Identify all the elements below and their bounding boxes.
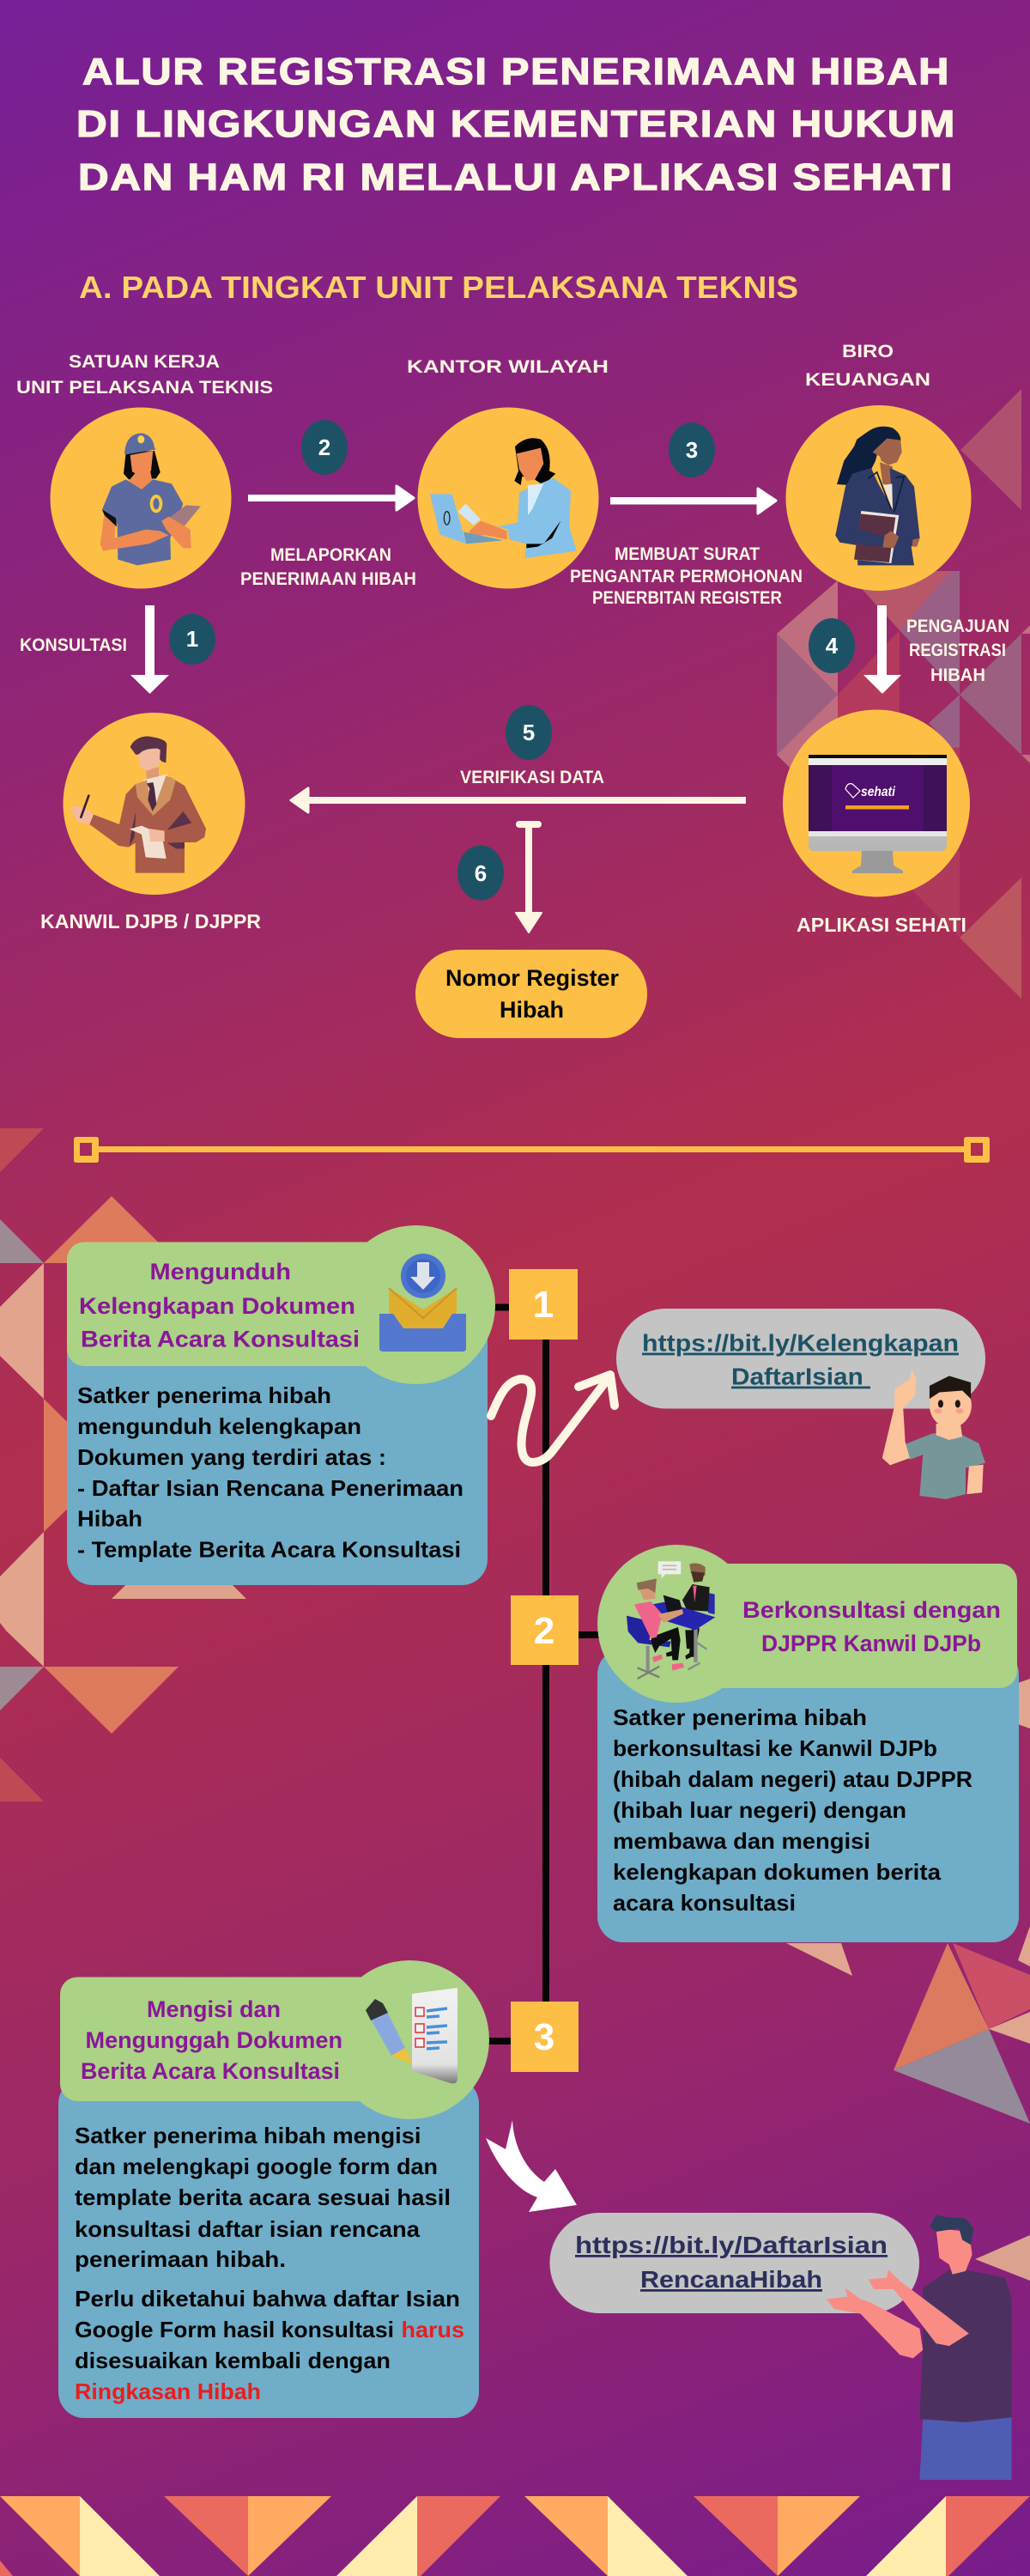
panel: step 1: Hibah [77, 1506, 142, 1532]
panel: step 1: Dokumen yang terdiri atas : [77, 1444, 386, 1470]
panel: step 1: Berita Acara Konsultasi [81, 1326, 360, 1352]
badge 3 [669, 422, 715, 477]
label: biro keuangan [805, 342, 930, 390]
badge 5 [506, 705, 552, 760]
step number 1: 1 [533, 1284, 554, 1326]
panel: step 2: DJPPR Kanwil DJPb [761, 1631, 981, 1656]
icon: sehati monitor in circle [783, 709, 970, 896]
badge 4: 4 [826, 633, 839, 659]
icon: pencil and checklist [366, 1988, 457, 2083]
panel: step 3: Google Form hasil konsultasi [75, 2317, 394, 2342]
panel: step 2: Satker penerima hibah [613, 1704, 867, 1730]
title [76, 51, 956, 198]
label: kanwil djpb / djppr: KANWIL DJPB / DJPPR [40, 910, 261, 933]
label: konsultasi: KONSULTASI [20, 635, 127, 655]
panel: step 3: template berita acara sesuai hasil [75, 2184, 451, 2210]
arrow 1 down to kanwil [130, 605, 169, 694]
icon: sehati monitor in circle: sehati [861, 785, 895, 799]
panel: step 1: Satker penerima hibah [77, 1382, 331, 1408]
panel: step 1: Kelengkapan Dokumen [79, 1293, 355, 1319]
icon: officer in circle [50, 407, 232, 589]
label: pengajuan registrasi hibah [906, 617, 1009, 685]
title: DI LINGKUNGAN KEMENTERIAN HUKUM [76, 103, 956, 145]
step number 2 [511, 1595, 579, 1665]
panel: step 1 [67, 1225, 495, 1585]
label: aplikasi sehati: APLIKASI SEHATI [797, 914, 966, 936]
badge 2 [301, 420, 348, 475]
panel: step 1: - Template Berita Acara Konsultasi [77, 1537, 461, 1563]
label: satuan kerja: SATUAN KERJA [69, 352, 220, 372]
panel: step 1: Mengunduh [149, 1259, 291, 1285]
panel: step 3: Ringkasan Hibah [75, 2379, 261, 2404]
label: pengajuan registrasi hibah: PENGAJUAN [906, 617, 1009, 636]
pill: nomor register hibah: Nomor Register [445, 965, 619, 991]
arrow 4 down to sehati [863, 605, 901, 694]
panel: step 1: mengunduh kelengkapan [77, 1413, 361, 1439]
panel: step 3: konsultasi daftar isian rencana [75, 2216, 421, 2242]
label: satuan kerja [16, 352, 273, 398]
label: pengajuan registrasi hibah: HIBAH [930, 665, 985, 685]
arrow 5 to kanwil [291, 788, 746, 812]
panel: step 2: (hibah luar negeri) dengan [613, 1797, 906, 1823]
panel: step 3: Satker penerima hibah mengisi [75, 2123, 421, 2148]
background triangles: upper right [777, 389, 1030, 999]
panel: step 2: kelengkapan dokumen berita [613, 1859, 942, 1885]
icon: woman with book in circle [786, 405, 972, 591]
background triangles: lower right [786, 1679, 1030, 2281]
timeline line [485, 1303, 601, 2044]
badge 2: 2 [318, 434, 330, 460]
panel: step 2: Berkonsultasi dengan [742, 1597, 1001, 1623]
pill: link 1 [616, 1309, 985, 1408]
arrow 3 to biro keuangan [610, 489, 776, 513]
badge 1: 1 [186, 626, 198, 652]
label: membuat surat [570, 544, 803, 608]
icon: woman with laptop in circle [417, 407, 599, 589]
arrow 6 to nomor register [516, 821, 542, 933]
pill: link 1: DaftarIsian [731, 1364, 870, 1389]
label: biro keuangan: KEUANGAN [805, 370, 930, 390]
title: ALUR REGISTRASI PENERIMAAN HIBAH [82, 51, 950, 93]
label: biro keuangan: BIRO [842, 342, 894, 361]
label: pengajuan registrasi hibah: REGISTRASI [909, 641, 1006, 660]
badge 5: 5 [523, 720, 535, 745]
pill: nomor register hibah: Hibah [500, 997, 564, 1023]
label: membuat surat: PENERBITAN REGISTER [592, 588, 782, 608]
label: membuat surat: PENGANTAR PERMOHONAN [570, 567, 803, 586]
arrow 2 to kantor wilayah [248, 486, 414, 510]
badge 3: 3 [686, 437, 698, 463]
icon: boy pointing up [882, 1370, 985, 1499]
panel: step 2 [597, 1545, 1019, 1942]
panel: step 3: Mengisi dan [147, 1996, 281, 2022]
icon: two people consulting [627, 1561, 715, 1679]
panel: step 3: disesuaikan kembali dengan [75, 2348, 391, 2373]
step number 3 [511, 2002, 579, 2072]
label: verifikasi data: VERIFIKASI DATA [460, 768, 604, 787]
step number 3: 3 [534, 2016, 554, 2058]
badge 6: 6 [475, 860, 487, 886]
icon: download inbox [379, 1254, 466, 1352]
background triangles: left side [0, 1128, 246, 1801]
step number 2: 2 [534, 1610, 554, 1652]
panel: step 3 [58, 1960, 489, 2418]
badge 4 [809, 618, 855, 673]
pill: link 2 [549, 2213, 919, 2313]
panel: step 1: - Daftar Isian Rencana Penerimaan [77, 1475, 464, 1501]
label: melaporkan: PENERIMAAN HIBAH [240, 569, 416, 589]
pill: link 1: https://bit.ly/Kelengkapan [642, 1329, 959, 1357]
label: melaporkan [240, 545, 416, 589]
panel: step 3: Berita Acara Konsultasi [81, 2058, 340, 2084]
panel: step 3: Mengunggah Dokumen [86, 2027, 342, 2053]
badge 1 [169, 614, 215, 665]
bottom triangle band [0, 2496, 1030, 2576]
divider [74, 1137, 990, 1163]
panel: step 2: acara konsultasi [613, 1890, 796, 1916]
arrow: hand-drawn wave to link 1 [491, 1375, 615, 1462]
badge 6 [457, 845, 504, 900]
arrow: curved white to link 2 [486, 2120, 577, 2212]
panel: step 3: Perlu diketahui bahwa daftar Isian [75, 2286, 460, 2312]
panel: step 3: penerimaan hibah. [75, 2246, 286, 2272]
heading: section A: A. PADA TINGKAT UNIT PELAKSANA TEKNIS [79, 270, 798, 305]
label: melaporkan: MELAPORKAN [270, 545, 391, 565]
label: kantor wilayah: KANTOR WILAYAH [407, 357, 609, 377]
pill: nomor register hibah [415, 950, 647, 1038]
icon: presenting man [827, 2215, 1012, 2480]
icon: man with notepad in circle [64, 713, 245, 895]
pill: link 2: https://bit.ly/DaftarIsian [575, 2232, 888, 2258]
label: membuat surat: MEMBUAT SURAT [615, 544, 760, 564]
panel: step 2: membawa dan mengisi [613, 1828, 870, 1854]
step number 1 [509, 1269, 578, 1340]
panel: step 2: berkonsultasi ke Kanwil DJPb [613, 1735, 937, 1761]
title: DAN HAM RI MELALUI APLIKASI SEHATI [78, 156, 954, 198]
panel: step 3: harus [402, 2317, 464, 2342]
pill: link 2: RencanaHibah [640, 2266, 822, 2293]
label: satuan kerja: UNIT PELAKSANA TEKNIS [16, 378, 273, 398]
panel: step 3: dan melengkapi google form dan [75, 2154, 438, 2179]
panel: step 2: (hibah dalam negeri) atau DJPPR [613, 1766, 972, 1792]
